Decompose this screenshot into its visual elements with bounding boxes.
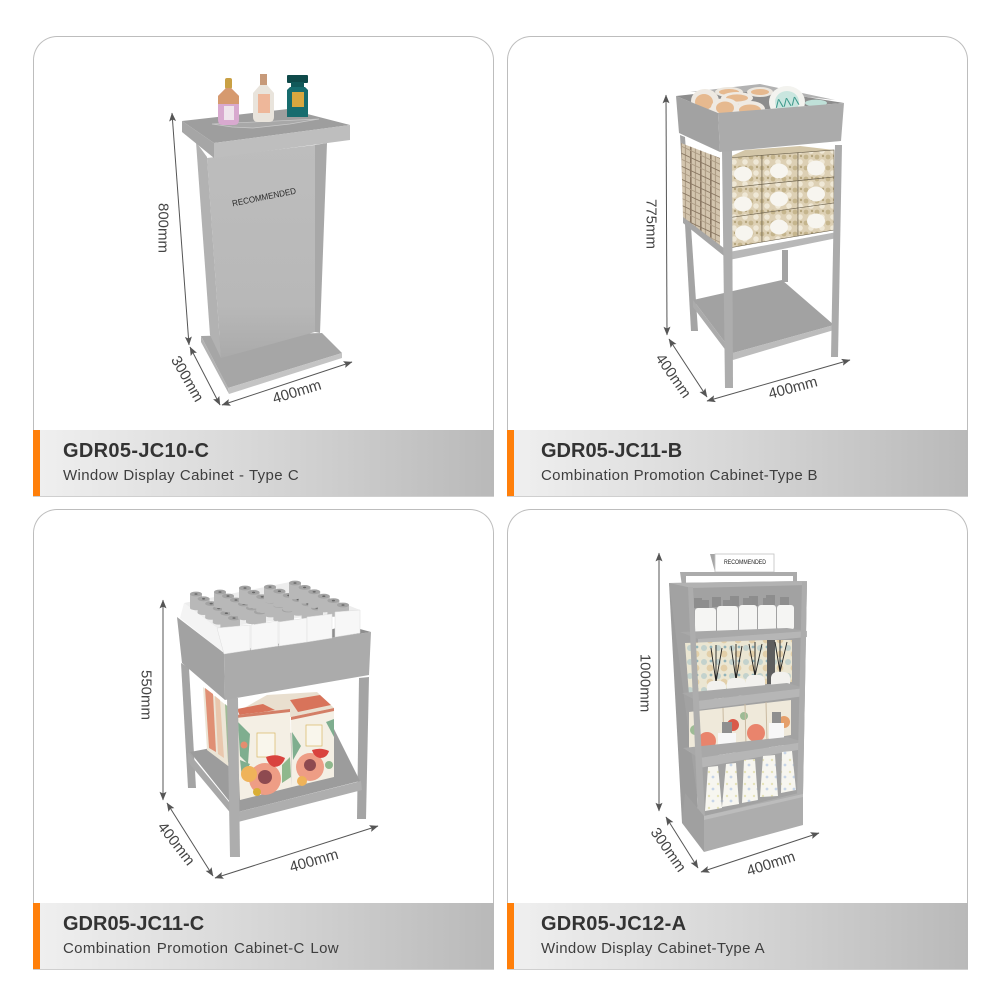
label: 550mm: 550mm [138,670,154,720]
caption [507,430,968,497]
sign: RECOMMENDED: RECOMMENDED [724,560,767,566]
back panel [669,581,807,818]
caption [33,430,494,497]
grey bottle caps column 1 [190,592,240,634]
row 3 white bottles [718,712,784,758]
stacked boxes: front grid [727,150,834,248]
white boxes front row [217,610,360,654]
stacked boxes: top strip [727,146,834,158]
middle shelf [683,217,837,260]
bottom shelf [693,280,834,360]
front legs [722,145,842,388]
top rail [669,581,807,588]
arrow: depth [669,339,707,397]
rear legs [680,135,788,331]
product: teal perfume bottle [287,75,308,117]
floral box tops [237,692,334,717]
label: 400mm depth: 400mm [154,819,198,869]
arrow: depth [167,803,213,876]
product: pink perfume bottle [218,78,239,125]
illustration: combination cabinet C low [138,580,378,879]
soaps in tray: VVV [774,93,800,111]
grey bottle caps column 5 [289,581,349,621]
row 4 packaging [705,751,796,811]
panel: GDR05-JC12-A window display cabinet type A [507,509,968,970]
label: 400mm: 400mm [271,377,323,407]
grey bottle caps column 4 [264,585,323,624]
arrow: height [162,600,164,800]
stacked boxes: plaid side [681,143,720,247]
product name: Window Display Cabinet - Type C [63,467,299,484]
arrow: width [701,833,819,872]
arrow: height [172,113,189,345]
arrow: width [215,826,378,878]
row 1 bottles [694,595,794,635]
counter top [182,109,350,158]
product name: Combination Promotion Cabinet-C Low [63,940,339,957]
illustration: combination cabinet type B [642,84,850,403]
product code: GDR05-JC11-B [541,440,682,462]
label: 400mm width: 400mm [288,846,340,876]
arrow: height [666,95,667,335]
shelf 2 [682,683,805,710]
shelf 1 [680,628,807,647]
tray [177,617,371,700]
accent bar [33,903,40,969]
caption [507,903,968,970]
illustration: window display cabinet type A [636,552,820,880]
tray interior [676,84,844,113]
top frame [680,572,797,586]
accent bar [507,903,514,969]
soaps in tray [691,86,827,118]
arrow: width [222,362,352,405]
label: 400mm width: 400mm [767,373,819,403]
arrow: depth [190,347,220,405]
reed diffusers [707,640,790,699]
bottles in tray [180,581,360,654]
shelf 3 [683,737,804,768]
product: clear perfume bottle [253,74,274,122]
label: 400mm depth: 400mm [652,351,694,401]
floral box: left front [236,709,292,800]
panel: GDR05-JC11-B combination promotion cabinet type B [507,36,968,497]
caption [33,903,494,970]
label: 775mm: 775mm [642,199,660,249]
product name: Window Display Cabinet-Type A [541,940,765,957]
panel: GDR05-JC10-C window display cabinet type C [33,36,494,497]
label: 1000mm: 1000mm [636,654,654,712]
base plinth [682,792,803,852]
product code: GDR05-JC11-C [63,913,204,935]
sign: RECOMMENDED [710,554,774,572]
label: 400mm: 400mm [745,848,797,880]
box labels [734,160,825,240]
side panel [669,583,698,823]
upright panel [196,142,327,358]
illustration: window display cabinet type C [154,74,352,407]
product name: Combination Promotion Cabinet-Type B [541,467,818,484]
label: 300mm: 300mm [647,825,689,875]
grey bottle caps column 3 [239,586,294,626]
label: 800mm: 800mm [154,203,172,253]
side of white boxes [180,603,224,653]
panel text: RECOMMENDED: RECOMMENDED [231,186,297,208]
rear legs [181,663,369,819]
white box tops [184,582,360,628]
arrow: height [658,553,660,811]
arrow: width [707,360,850,401]
product code: GDR05-JC10-C [63,440,209,462]
panel: GDR05-JC11-C combination promotion cabinet low [33,509,494,970]
lower shelf [188,725,362,822]
label: 300mm: 300mm [167,353,207,405]
front posts [688,582,807,817]
arrow: depth [666,817,698,868]
front leg [227,698,240,857]
accent bar [33,430,40,496]
product code: GDR05-JC12-A [541,913,686,935]
row 3 floral boxes [689,700,791,752]
base plate [201,333,342,394]
floral boxes: rear stack [203,687,240,775]
tray [676,96,844,152]
row 2 backdrop boxes [685,640,792,695]
floral box: right front [291,708,334,787]
grey bottle caps column 2 [214,590,266,628]
accent bar [507,430,514,496]
